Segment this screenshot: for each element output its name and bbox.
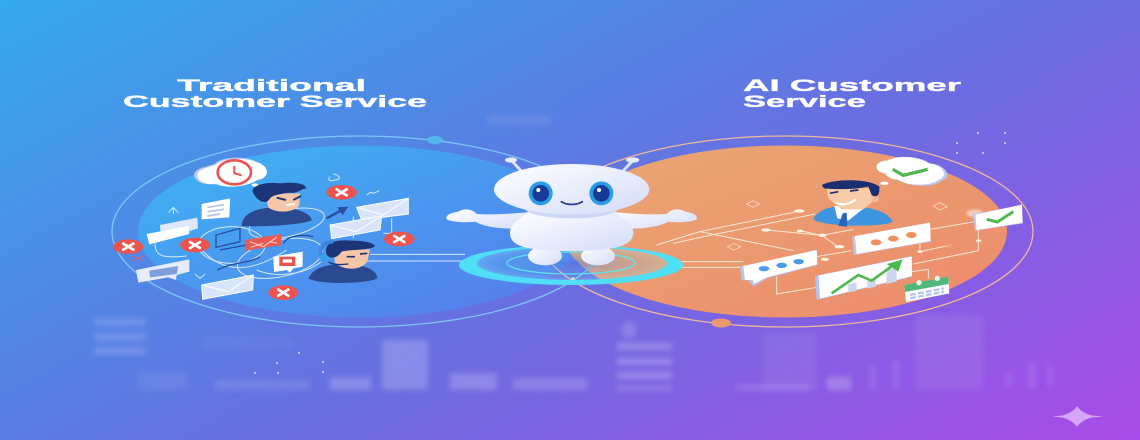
heading: traditional customer service: Customer Service bbox=[123, 92, 427, 111]
red mail icon bbox=[245, 234, 282, 251]
antennae bbox=[505, 157, 639, 173]
blurred skyline backdrop bbox=[94, 115, 1053, 390]
heading: AI customer service: Service bbox=[743, 92, 866, 111]
envelopes bbox=[202, 198, 408, 299]
red alert card bbox=[273, 252, 303, 273]
head bbox=[494, 164, 649, 218]
ring: traditional orbit bbox=[112, 136, 608, 327]
status card bbox=[852, 223, 931, 255]
traditional illustration bbox=[113, 158, 465, 300]
check card bbox=[973, 205, 1023, 231]
ring: AI orbit bbox=[537, 136, 1033, 328]
glow bbox=[966, 209, 984, 217]
agent two with headset bbox=[308, 240, 377, 283]
thought bubble with clock bbox=[194, 158, 267, 187]
agent one bbox=[242, 183, 312, 226]
growth chart card bbox=[815, 256, 912, 300]
AI service agent bbox=[813, 180, 893, 227]
flow lines bbox=[657, 201, 978, 294]
heading: traditional customer service bbox=[123, 76, 427, 111]
chat card bbox=[740, 250, 817, 287]
feet bbox=[528, 247, 615, 265]
heading: AI customer service: AI Customer bbox=[743, 76, 962, 95]
calendar bbox=[904, 276, 949, 302]
envelope chat bubble bbox=[136, 259, 189, 283]
dark wire icon bbox=[216, 209, 343, 270]
heading: traditional customer service: Traditional bbox=[177, 76, 366, 95]
small red cross bbox=[132, 256, 143, 261]
robot mascot bbox=[446, 157, 697, 285]
torso bbox=[510, 212, 633, 251]
node dots bbox=[761, 209, 981, 261]
note card bbox=[202, 198, 230, 219]
panel: AI disc bbox=[563, 146, 1007, 318]
error badges bbox=[113, 185, 415, 300]
tangled process lines bbox=[155, 174, 465, 285]
small star particles bbox=[254, 132, 1006, 374]
arrow head bbox=[337, 207, 348, 215]
panel: traditional disc bbox=[138, 146, 582, 318]
eyes and smile bbox=[529, 181, 613, 205]
hologram platform bbox=[459, 245, 683, 285]
thought bubble with check bbox=[876, 157, 947, 186]
chat stack bbox=[147, 218, 198, 244]
orbit junction node bbox=[571, 277, 575, 281]
arms bbox=[446, 209, 697, 229]
heading: AI customer service bbox=[743, 76, 962, 111]
sparkle logo bbox=[1052, 406, 1104, 427]
AI illustration bbox=[657, 157, 1023, 302]
